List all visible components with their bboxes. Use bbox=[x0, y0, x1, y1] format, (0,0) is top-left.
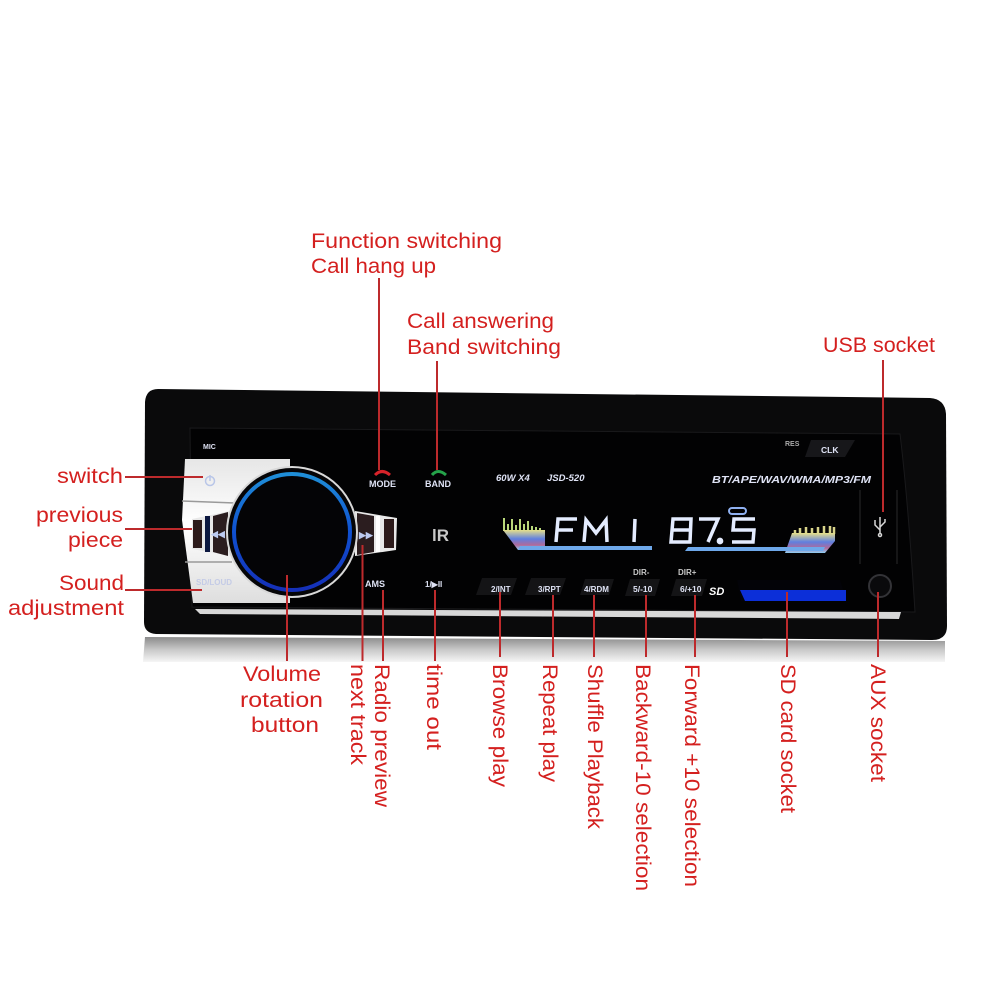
model labels bbox=[496, 473, 871, 486]
model labels: JSD-520 bbox=[547, 473, 585, 484]
silver control panel bbox=[182, 459, 290, 603]
preset buttons: DIR+ bbox=[678, 568, 697, 577]
preset buttons: 3/RPT bbox=[538, 585, 561, 594]
callout: shuffle playback: Shuffle Playback bbox=[583, 664, 606, 830]
callout: function switching bbox=[311, 230, 502, 470]
left rocker button: ◀◀ bbox=[210, 529, 226, 539]
callout: sound adjustment bbox=[8, 572, 202, 620]
chrome strip bbox=[195, 609, 901, 619]
preset buttons: 2/INT bbox=[491, 585, 511, 594]
callout: sound adjustment: adjustment bbox=[8, 597, 124, 620]
inner panel bbox=[190, 428, 915, 612]
callout: USB socket: USB socket bbox=[823, 334, 935, 357]
callout: function switching: Function switching bbox=[311, 230, 502, 253]
callout: call answering bbox=[407, 310, 561, 470]
USB icon bbox=[875, 517, 885, 536]
BAND button bbox=[425, 472, 451, 489]
RES and CLK buttons: CLK bbox=[821, 445, 839, 455]
callout: call answering: Call answering bbox=[407, 310, 554, 333]
callout: repeat play: Repeat play bbox=[538, 664, 561, 783]
callout: function switching: Call hang up bbox=[311, 255, 436, 278]
RES and CLK buttons: RES bbox=[785, 441, 800, 448]
left rocker button bbox=[192, 511, 232, 556]
power icon bbox=[206, 475, 214, 486]
right rocker button bbox=[355, 511, 397, 556]
callout: previous piece: piece bbox=[68, 529, 123, 552]
left equalizer display bbox=[503, 518, 652, 550]
callout: backward selection: Backward-10 selection bbox=[631, 664, 654, 891]
callout: next track: next track bbox=[346, 664, 369, 766]
reflection below unit bbox=[143, 637, 945, 662]
model labels: 60W X4 bbox=[496, 473, 531, 484]
AMS button: AMS bbox=[365, 579, 385, 589]
BAND button: BAND bbox=[425, 479, 451, 489]
callout: previous piece bbox=[36, 504, 192, 552]
MODE button: MODE bbox=[369, 479, 396, 489]
preset buttons: 6/+10 bbox=[680, 584, 702, 594]
callout: sound adjustment: Sound bbox=[59, 572, 124, 595]
MODE button bbox=[369, 472, 396, 489]
callout: volume rotation button: Volume bbox=[243, 663, 321, 686]
preset buttons: 5/-10 bbox=[633, 584, 653, 594]
model labels: BT/APE/WAV/WMA/MP3/FM bbox=[712, 474, 871, 486]
callout: call answering: Band switching bbox=[407, 336, 561, 359]
SD/LOUD label: SD/LOUD bbox=[196, 578, 232, 587]
callout: time out: time out bbox=[422, 664, 445, 750]
volume knob bbox=[226, 466, 358, 598]
callout: AUX socket: AUX socket bbox=[866, 664, 889, 782]
SD card slot bbox=[737, 580, 847, 601]
callout: forward selection: Forward +10 selection bbox=[680, 664, 703, 887]
right equalizer display bbox=[685, 526, 835, 553]
play pause button: 1/▶II bbox=[425, 580, 442, 589]
preset buttons bbox=[476, 568, 707, 596]
callout: switch: switch bbox=[57, 465, 123, 488]
USB slot bbox=[860, 490, 897, 564]
callout: volume rotation button: rotation bbox=[240, 689, 323, 712]
callout: radio preview: Radio preview bbox=[370, 664, 393, 808]
callout: browse play: Browse play bbox=[488, 664, 511, 788]
MIC label: MIC bbox=[203, 444, 216, 451]
callout: volume rotation button: button bbox=[251, 714, 319, 737]
callout: previous piece: previous bbox=[36, 504, 123, 527]
car stereo unit bbox=[143, 389, 947, 662]
SD logo: SD bbox=[709, 586, 724, 598]
right rocker button: ▶▶ bbox=[358, 530, 374, 540]
RES and CLK buttons bbox=[785, 440, 855, 457]
preset buttons: 4/RDM bbox=[584, 585, 609, 594]
callout: SD card socket: SD card socket bbox=[776, 664, 799, 813]
panel seams bbox=[182, 501, 235, 562]
IR window: lR bbox=[432, 526, 449, 545]
preset buttons: DIR- bbox=[633, 568, 650, 577]
AUX socket bbox=[869, 575, 891, 597]
outer faceplate bbox=[144, 389, 947, 640]
callout: volume rotation button bbox=[240, 575, 323, 737]
display frequency readout bbox=[556, 508, 755, 543]
